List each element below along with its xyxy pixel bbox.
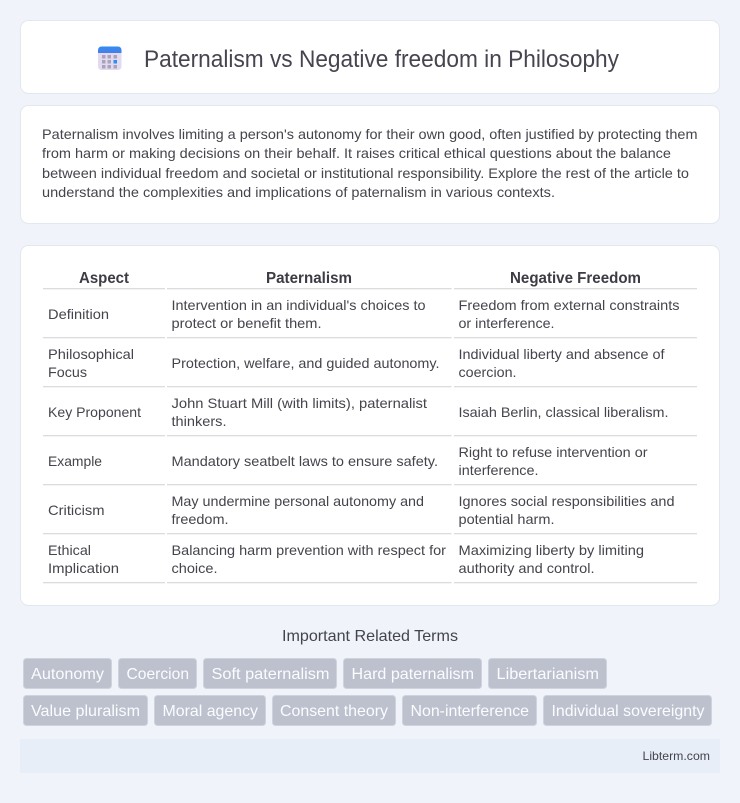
- table header row: Aspect: [79, 270, 130, 287]
- tag: soft paternalism: [204, 658, 336, 688]
- row: philosophical focus: Philosophical: [48, 346, 134, 362]
- row: philosophical focus: Protection, welfare, and guided autonomy.: [172, 355, 440, 371]
- tag: value pluralism: [24, 696, 148, 726]
- row: example: Example: [48, 453, 102, 469]
- row: definition: [43, 297, 697, 338]
- row: ethical implication: [43, 542, 697, 583]
- tag: coercion: Coercion: [126, 666, 189, 683]
- tag: consent theory: [272, 696, 396, 726]
- footer credit: Libterm.com: [642, 749, 710, 763]
- row: example: interference.: [458, 462, 538, 478]
- intro text block: understand the complexities and implications of paternalism in various contexts.: [42, 184, 555, 200]
- title: Paternalism vs Negative freedom in Philosophy: [144, 46, 619, 73]
- row: definition: Intervention in an individual's choices to: [172, 297, 426, 313]
- row: definition: Freedom from external constraints: [458, 297, 680, 313]
- row: philosophical focus: coercion.: [458, 364, 516, 380]
- header panel: [20, 20, 720, 94]
- related terms heading: Important Related Terms: [282, 628, 458, 645]
- row: criticism: [43, 493, 697, 534]
- row: criticism: freedom.: [172, 511, 228, 527]
- row: criticism: Ignores social responsibilities and: [458, 493, 674, 509]
- row: key proponent: [43, 395, 697, 436]
- tag: value pluralism: Value pluralism: [31, 703, 140, 720]
- row: philosophical focus: [43, 346, 697, 387]
- row: key proponent: Isaiah Berlin, classical liberalism.: [458, 404, 668, 420]
- tag: individual sovereignty: [544, 696, 712, 726]
- related terms tags: [24, 658, 712, 726]
- intro text block: [42, 126, 698, 200]
- tag: libertarianism: [488, 658, 606, 688]
- tag: moral agency: Moral agency: [162, 703, 258, 720]
- tag: libertarianism: Libertarianism: [496, 666, 599, 683]
- row: key proponent: Key Proponent: [48, 404, 141, 420]
- footer bar: [20, 739, 720, 773]
- row: ethical implication: Ethical: [48, 542, 91, 558]
- row: ethical implication: Maximizing liberty by limiting: [458, 542, 644, 558]
- tag: moral agency: [154, 696, 266, 726]
- row: example: Right to refuse intervention or: [458, 444, 648, 460]
- table header row: Paternalism: [266, 270, 352, 287]
- panel: introduction: [20, 106, 720, 224]
- icon: calendar: [98, 46, 122, 70]
- tag: consent theory: Consent theory: [280, 703, 388, 720]
- row: key proponent: John Stuart Mill (with limits), paternalist: [172, 395, 427, 411]
- intro text block: from harm or making decisions on their behalf. It raises critical ethical questions about the balance: [42, 145, 671, 161]
- intro text block: between individual freedom and societal or institutional responsibility. Explore the rest of the article to: [42, 165, 689, 181]
- panel: comparison table: [20, 246, 720, 606]
- row: criticism: Criticism: [48, 502, 104, 518]
- row: criticism: potential harm.: [458, 511, 554, 527]
- row: definition: Definition: [48, 306, 109, 322]
- tag: hard paternalism: [344, 658, 482, 688]
- tag: non-interference: Non-interference: [410, 703, 529, 720]
- tag: coercion: [118, 658, 196, 688]
- tag: non-interference: [402, 696, 536, 726]
- row: ethical implication: choice.: [172, 560, 218, 576]
- intro text block: Paternalism involves limiting a person's autonomy for their own good, often justified by protecting them: [42, 126, 698, 142]
- tag: hard paternalism: Hard paternalism: [352, 666, 474, 683]
- row: philosophical focus: Focus: [48, 364, 87, 380]
- tag: autonomy: Autonomy: [31, 666, 104, 683]
- table header row: [43, 270, 697, 289]
- tag: soft paternalism: Soft paternalism: [212, 666, 330, 683]
- row: definition: protect or benefit them.: [172, 315, 322, 331]
- row: definition: or interference.: [458, 315, 554, 331]
- row: ethical implication: authority and control.: [458, 560, 594, 576]
- row: example: Mandatory seatbelt laws to ensure safety.: [172, 453, 438, 469]
- tag: autonomy: [24, 658, 112, 688]
- row: ethical implication: Implication: [48, 560, 119, 576]
- row: example: [43, 444, 697, 485]
- row: ethical implication: Balancing harm prevention with respect for: [172, 542, 446, 558]
- table header row: Negative Freedom: [510, 270, 641, 287]
- row: key proponent: thinkers.: [172, 413, 226, 429]
- tag: individual sovereignty: Individual sovereignty: [552, 703, 704, 720]
- row: criticism: May undermine personal autonomy and: [172, 493, 424, 509]
- row: philosophical focus: Individual liberty and absence of: [458, 346, 665, 362]
